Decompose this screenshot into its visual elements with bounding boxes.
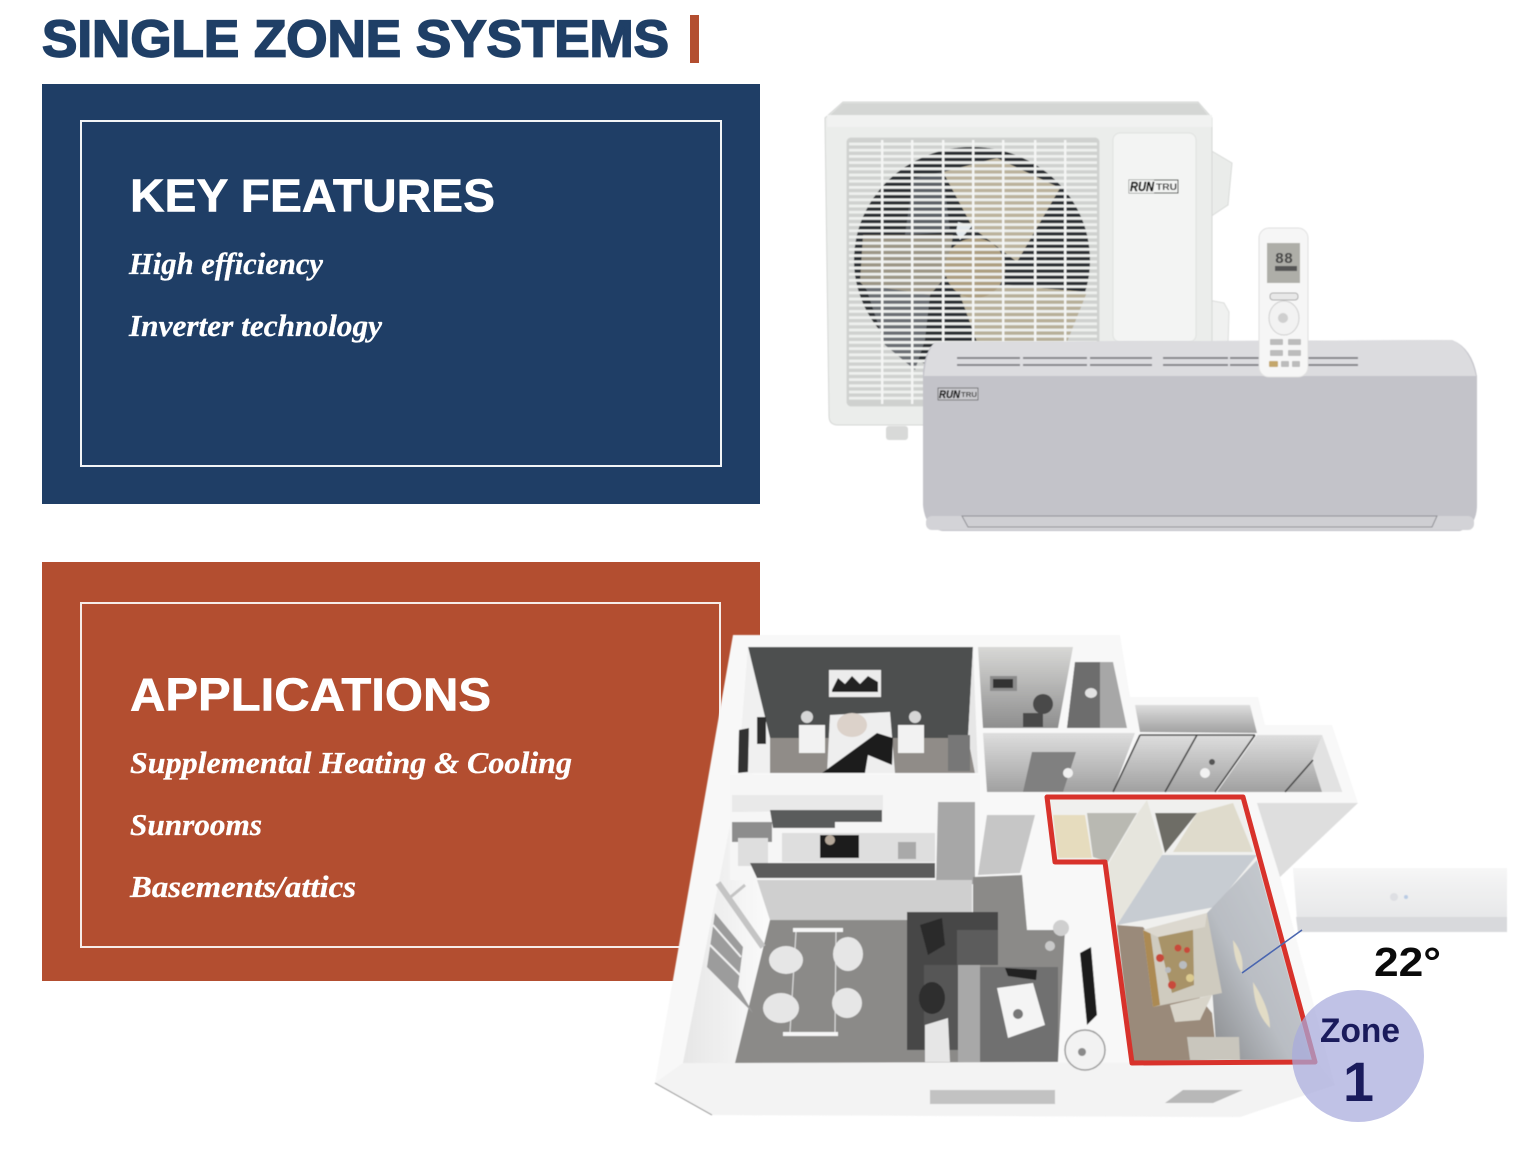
applications list: [129, 745, 572, 904]
illustration: remote control: 88: [1275, 251, 1293, 268]
feature list: High efficiency: [128, 246, 323, 281]
illustration: zone wall unit: [1293, 868, 1507, 932]
living and dining floor: [735, 875, 1065, 1063]
tv and stool: [1045, 920, 1105, 1070]
bedroom: [738, 647, 978, 773]
closets: [1113, 705, 1342, 792]
sofa: [907, 912, 1045, 1062]
zone 1 badge: [1292, 990, 1424, 1122]
title: SINGLE ZONE SYSTEMS: [42, 10, 669, 68]
plan shell: [655, 635, 1358, 1117]
label: runtru outdoor: RUN: [1130, 179, 1155, 194]
crib: [1143, 913, 1222, 1022]
label: runtru outdoor: TRU: [1156, 182, 1177, 192]
heading: applications: APPLICATIONS: [130, 668, 491, 720]
panel: key features: [42, 84, 760, 504]
applications list: Sunrooms: [130, 807, 262, 842]
zone 1 badge: 1: [1343, 1050, 1374, 1113]
illustration: indoor wall unit: [923, 340, 1477, 531]
label: runtru indoor: TRU: [961, 390, 977, 399]
airflow line: [1242, 930, 1302, 973]
label: runtru outdoor: [1129, 179, 1178, 194]
zone room interior: [1047, 797, 1315, 1063]
utility rooms: [978, 647, 1135, 792]
applications list: Basements/attics: [129, 869, 356, 904]
illustration: remote control: [1259, 228, 1308, 377]
panel: applications: [42, 562, 760, 981]
feature list: Inverter technology: [128, 308, 382, 343]
kitchen: [730, 775, 1035, 886]
label: runtru indoor: [938, 388, 978, 401]
illustration: floor plan: [655, 635, 1358, 1117]
window wall: [707, 883, 763, 1013]
applications list: Supplemental Heating & Cooling: [130, 745, 572, 780]
feature list: [128, 246, 382, 343]
label: runtru indoor: RUN: [939, 389, 961, 401]
illustration: outdoor condenser unit: [825, 102, 1232, 440]
temperature reading: 22°: [1374, 939, 1441, 985]
heading: key features: KEY FEATURES: [130, 170, 495, 222]
zone 1 badge: Zone: [1320, 1012, 1400, 1050]
fan: [854, 147, 1090, 373]
zone red outline: [1047, 797, 1315, 1063]
bottom windows: [930, 1090, 1243, 1104]
dining set: [763, 928, 863, 1036]
